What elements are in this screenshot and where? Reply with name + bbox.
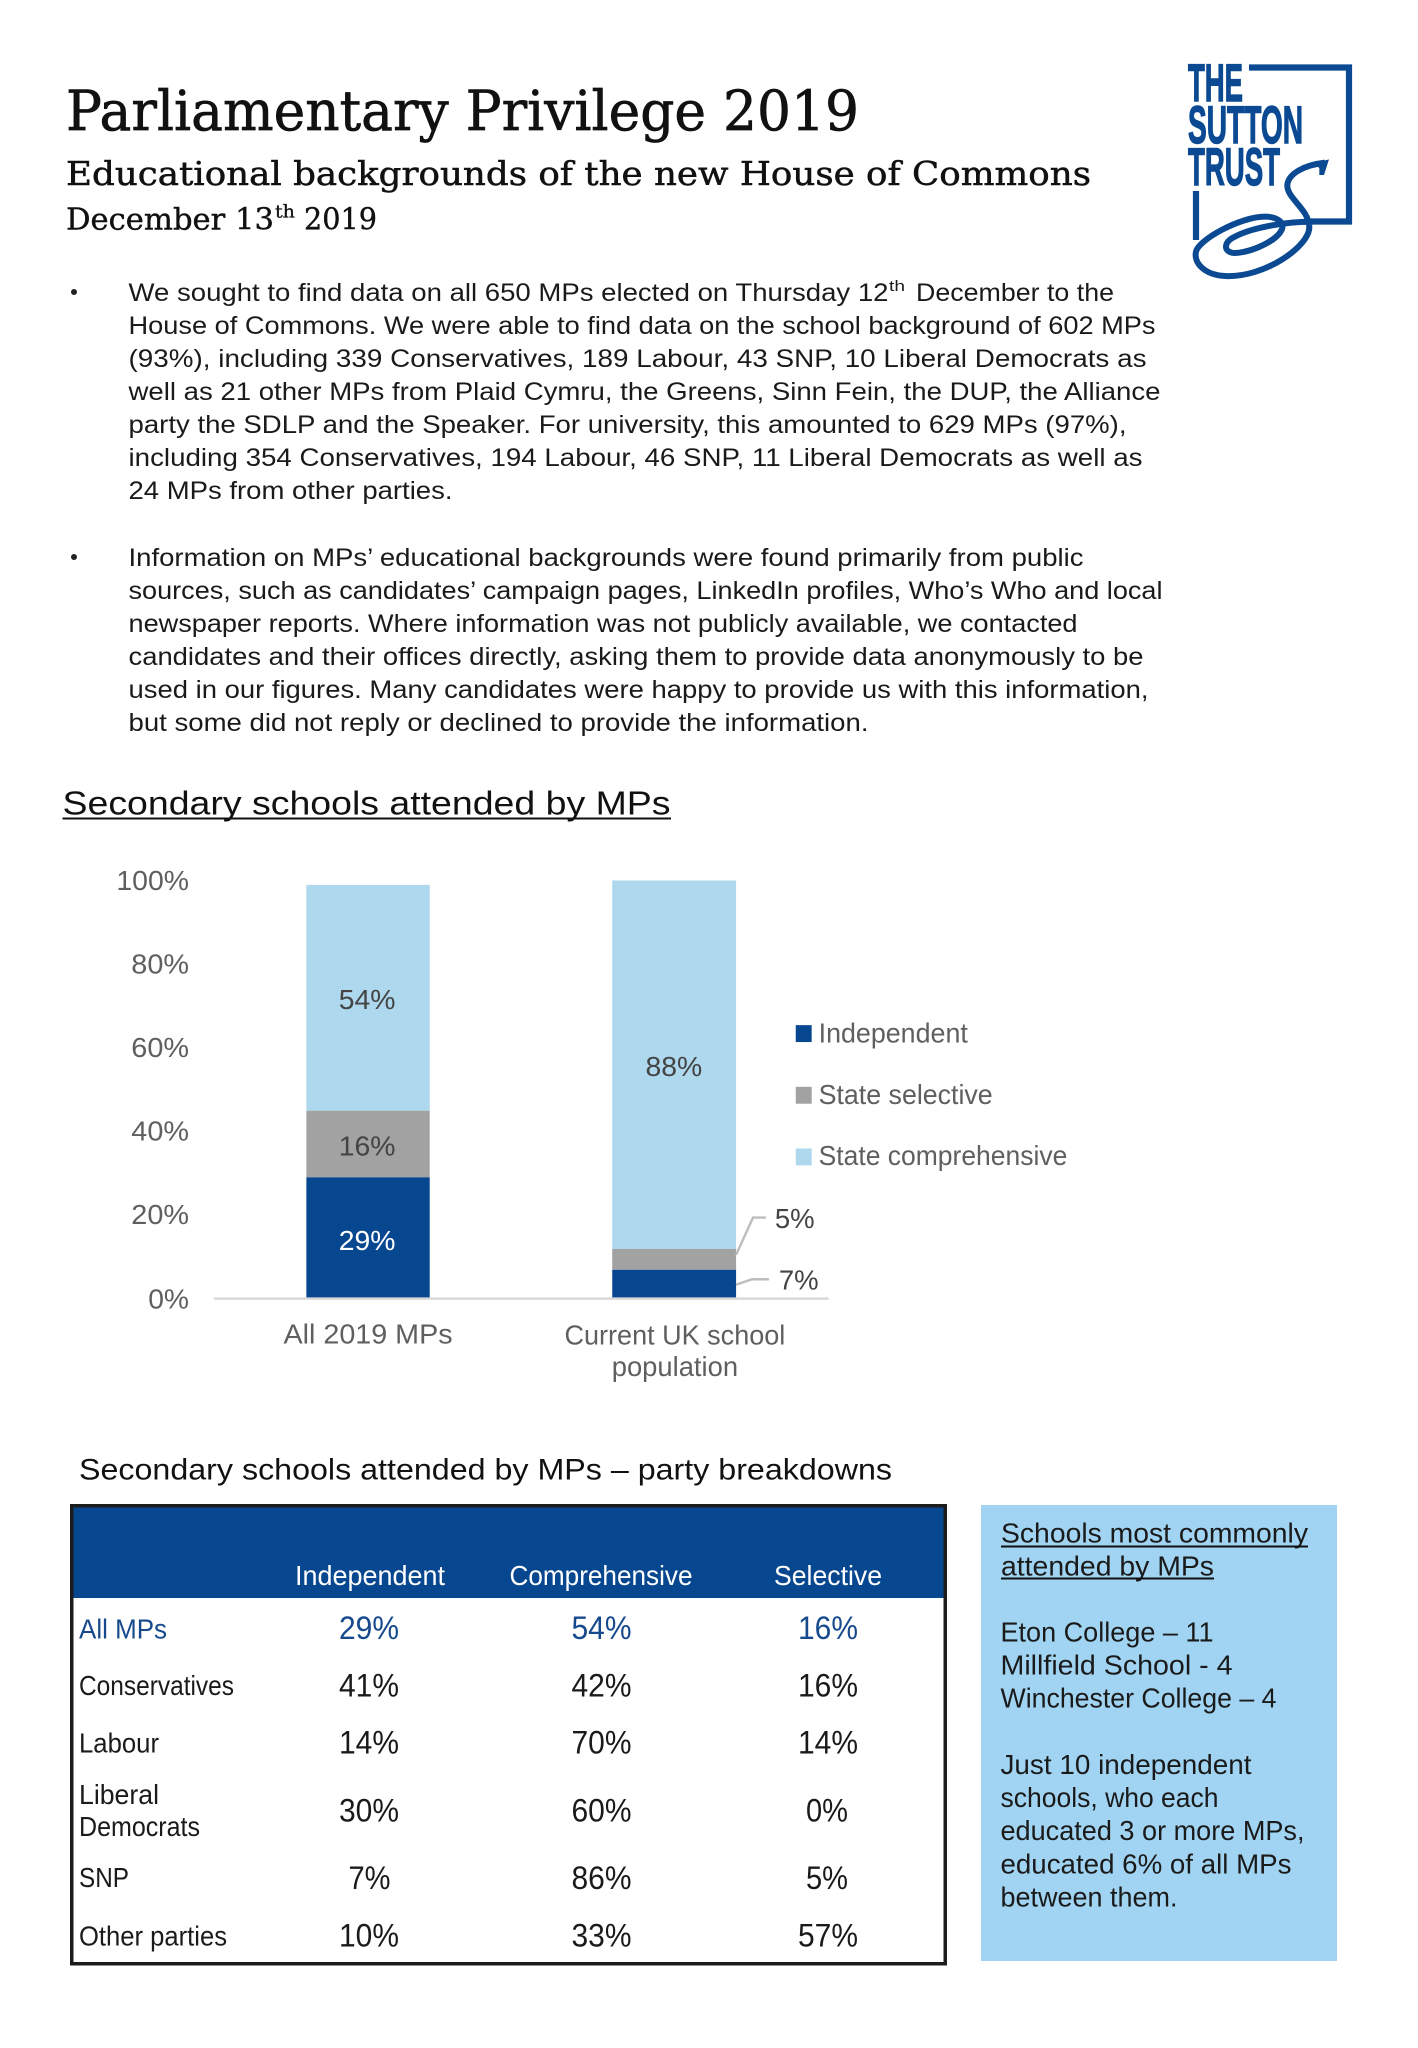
legend: State comprehensive	[819, 1140, 1067, 1171]
row: Liberal Democrats: Liberal	[79, 1779, 159, 1810]
panel heading	[1001, 1518, 1308, 1582]
legend: Independent	[819, 1018, 968, 1049]
row: All MPs: 29%	[339, 1610, 399, 1646]
row: Labour	[79, 1724, 858, 1760]
row: SNP: 7%	[348, 1860, 390, 1896]
row: SNP: 86%	[572, 1860, 632, 1896]
x axis labels	[283, 1318, 785, 1382]
subtitle: Educational backgrounds of the new House of Commons	[66, 154, 1091, 193]
bullet paragraph 2: Information on MPs’ educational backgrounds were found primarily from public	[128, 544, 1084, 572]
bullet paragraph 1	[71, 278, 1160, 505]
table: party breakdowns	[70, 1506, 947, 1964]
date: th	[275, 202, 295, 222]
y axis labels: 60%	[131, 1032, 189, 1063]
row: Liberal Democrats: 0%	[806, 1792, 848, 1828]
row: Conservatives: 16%	[798, 1668, 858, 1704]
y axis labels: 20%	[131, 1199, 189, 1230]
bullet paragraph 2: newspaper reports. Where information was not publicly available, we contacted	[128, 610, 1078, 638]
bullet paragraph 2	[71, 544, 1162, 737]
panel note: between them.	[1000, 1882, 1178, 1913]
bullet paragraph 1: December to the	[916, 279, 1114, 307]
y axis labels: 100%	[116, 865, 189, 896]
row: Other parties: Other parties	[79, 1921, 227, 1952]
panel note: educated 6% of all MPs	[1000, 1848, 1292, 1879]
row: SNP: 5%	[806, 1860, 848, 1896]
table header	[70, 1506, 947, 1598]
panel: most common schools	[981, 1505, 1337, 1961]
bullet paragraph 1: We sought to find data on all 650 MPs elected on Thursday 12	[128, 279, 888, 307]
row: SNP: SNP	[79, 1862, 129, 1893]
row: Labour: 14%	[798, 1724, 858, 1760]
row: All MPs	[79, 1610, 858, 1646]
bullet paragraph 1: party the SDLP and the Speaker. For university, this amounted to 629 MPs (97%),	[128, 411, 1126, 439]
bar: All 2019 MPs: 16%	[339, 1130, 395, 1161]
row: All MPs: All MPs	[79, 1613, 167, 1644]
x axis labels: Current UK school	[564, 1319, 785, 1350]
row: Liberal Democrats: 30%	[339, 1792, 399, 1828]
bullet paragraph 1: (93%), including 339 Conservatives, 189 Labour, 43 SNP, 10 Liberal Democrats as	[128, 345, 1146, 373]
x axis labels: All 2019 MPs	[283, 1318, 453, 1349]
leader label: 5%	[736, 1203, 815, 1255]
y axis labels	[116, 865, 189, 1315]
panel note: schools, who each	[1000, 1782, 1218, 1813]
table header: Independent	[295, 1560, 445, 1591]
bar: All 2019 MPs	[306, 885, 430, 1298]
bullet paragraph 1: House of Commons. We were able to find data on the school background of 602 MPs	[128, 312, 1156, 340]
table header: Selective	[774, 1560, 882, 1591]
school list: Winchester College – 4	[1000, 1682, 1276, 1714]
panel heading: attended by MPs	[1001, 1550, 1214, 1582]
bar: Current UK school population	[612, 880, 736, 1298]
row: Conservatives: Conservatives	[79, 1670, 234, 1701]
panel note: Just 10 independent	[1000, 1749, 1252, 1780]
row: Conservatives: 41%	[339, 1668, 399, 1704]
bullet paragraph 2: sources, such as candidates’ campaign pages, LinkedIn profiles, Who’s Who and local	[128, 577, 1162, 605]
legend: State selective	[819, 1079, 993, 1110]
row: All MPs: 54%	[572, 1610, 632, 1646]
row: Labour: 14%	[339, 1724, 399, 1760]
bar: Current UK school population: 88%	[646, 1051, 702, 1082]
date: 2019	[304, 202, 377, 238]
panel heading: Schools most commonly	[1001, 1518, 1308, 1549]
row: Other parties: 57%	[798, 1918, 858, 1954]
logo: The Sutton Trust: SUTTON	[1188, 96, 1303, 155]
school list	[1000, 1617, 1276, 1714]
leader label: 7%: 7%	[779, 1265, 819, 1296]
row: Liberal Democrats: 60%	[572, 1792, 632, 1828]
bullet paragraph 1: 24 MPs from other parties.	[128, 477, 452, 505]
bullet paragraph 2: candidates and their offices directly, asking them to provide data anonymously to be	[128, 643, 1144, 671]
row: Other parties	[79, 1918, 858, 1954]
y axis labels: 40%	[131, 1116, 189, 1147]
bullet paragraph 2: used in our figures. Many candidates were happy to provide us with this information,	[128, 676, 1148, 704]
table header: Comprehensive	[510, 1560, 692, 1591]
y axis labels: 80%	[131, 948, 189, 979]
title: Parliamentary Privilege 2019	[66, 79, 859, 143]
panel note: educated 3 or more MPs,	[1000, 1815, 1304, 1846]
logo: The Sutton Trust	[1188, 54, 1349, 276]
row: SNP	[79, 1860, 848, 1896]
bullet paragraph 1: th	[889, 278, 905, 295]
row: Labour: 70%	[572, 1724, 632, 1760]
stacked bar chart	[116, 865, 1067, 1382]
row: Liberal Democrats	[79, 1779, 848, 1842]
x axis	[214, 1297, 829, 1300]
row: Other parties: 10%	[339, 1918, 399, 1954]
date: December 13	[66, 202, 274, 238]
row: Conservatives: 42%	[572, 1668, 632, 1704]
heading: party breakdowns: Secondary schools attended by MPs – party breakdowns	[79, 1454, 892, 1486]
heading: secondary schools: Secondary schools attended by MPs	[62, 784, 670, 822]
bullet paragraph 1: well as 21 other MPs from Plaid Cymru, the Greens, Sinn Fein, the DUP, the Alliance	[127, 378, 1160, 406]
logo: The Sutton Trust: THE	[1188, 54, 1243, 113]
school list: Millfield School - 4	[1000, 1650, 1232, 1680]
row: Liberal Democrats: Democrats	[79, 1811, 200, 1842]
leader label: 5%: 5%	[775, 1203, 815, 1234]
bullet paragraph 1: including 354 Conservatives, 194 Labour, 46 SNP, 11 Liberal Democrats as well as	[128, 444, 1142, 472]
row: All MPs: 16%	[798, 1610, 858, 1646]
bar: All 2019 MPs: 54%	[339, 984, 395, 1015]
bullet paragraph 2: but some did not reply or declined to provide the information.	[128, 709, 868, 737]
leader label: 7%	[736, 1265, 819, 1296]
y axis labels: 0%	[148, 1284, 189, 1315]
date	[66, 202, 377, 238]
logo: The Sutton Trust: TRUST	[1188, 138, 1280, 197]
school list: Eton College – 11	[1000, 1617, 1214, 1648]
panel note	[1000, 1749, 1304, 1913]
legend	[796, 1018, 1067, 1171]
bar: All 2019 MPs: 29%	[339, 1225, 395, 1256]
row: Conservatives	[79, 1668, 858, 1704]
x axis labels: population	[612, 1351, 738, 1382]
row: Other parties: 33%	[572, 1918, 632, 1954]
row: Labour: Labour	[79, 1728, 159, 1758]
